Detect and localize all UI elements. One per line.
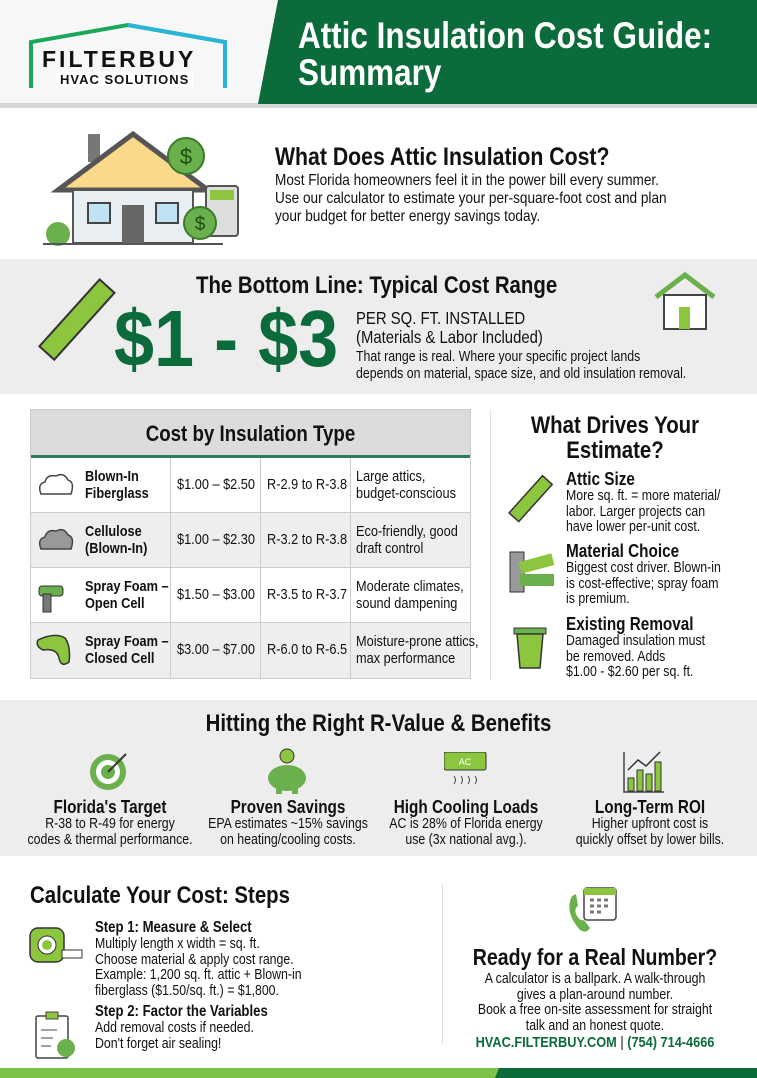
- text block: A calculator is a ballpark. A walk-through: [485, 971, 705, 987]
- rows: $3.00 – $7.00: [177, 641, 255, 658]
- benefit: cooling: AC is 28% of Florida energy: [389, 816, 543, 832]
- rows: $1.00 – $2.30: [177, 531, 255, 548]
- text block: Use our calculator to estimate your per-square-foot cost and plan: [275, 190, 667, 207]
- icon: clipboard: [35, 1012, 75, 1059]
- rows: Eco-friendly, good: [356, 523, 458, 540]
- logo: HVAC SOLUTIONS: [60, 72, 189, 87]
- icon: tape measure: [29, 927, 82, 963]
- rows: Large attics,: [356, 468, 425, 485]
- benefit: roi: Long-Term ROI: [595, 797, 705, 817]
- benefit: roi: Higher upfront cost is: [592, 816, 708, 832]
- text block: your budget for better energy savings today.: [275, 208, 540, 225]
- text block: PER SQ. FT. INSTALLED: [356, 308, 525, 328]
- icon: phone calendar: [569, 887, 617, 932]
- driver: removal: Damaged insulation must: [566, 633, 705, 649]
- benefit: target: R-38 to R-49 for energy: [45, 816, 175, 832]
- title banner: [258, 0, 757, 104]
- benefit: cooling: High Cooling Loads: [394, 797, 538, 817]
- rows: R-3.5 to R-3.7: [267, 586, 347, 603]
- rows: Cellulose: [85, 523, 142, 540]
- step 2: Step 2: Factor the Variables: [95, 1003, 268, 1020]
- benefit: savings: [208, 797, 368, 848]
- rows: $1.50 – $3.00: [177, 586, 255, 603]
- rows: Fiberglass: [85, 484, 149, 502]
- heading: Calculate Your Cost: Steps: [30, 882, 290, 909]
- rows: Blown-In: [85, 468, 139, 485]
- rows: Spray Foam –: [85, 633, 169, 650]
- panel: steps: [29, 882, 302, 1059]
- driver: removal: [566, 614, 705, 680]
- driver: material: [566, 541, 721, 607]
- driver: material: is cost-effective; spray foam: [566, 576, 719, 592]
- logo: [29, 23, 227, 88]
- panel: cost range: depends on material, space size, and old insulation removal.: [356, 366, 686, 382]
- title banner: Attic Insulation Cost Guide:: [298, 15, 712, 56]
- icon: house outline: [654, 272, 716, 330]
- text block: gives a plan-around number.: [517, 986, 673, 1002]
- benefit: target: Florida's Target: [53, 797, 167, 817]
- benefit: cooling: use (3x national avg.).: [405, 832, 527, 848]
- table header: [31, 410, 470, 458]
- step 1: Example: 1,200 sq. ft. attic + Blown-in: [95, 967, 302, 983]
- step 2: Don't forget air sealing!: [95, 1036, 221, 1052]
- panel: drivers: [508, 412, 721, 680]
- heading: What Does Attic Insulation Cost?: [275, 143, 610, 171]
- text block: Most Florida homeowners feel it in the power bill every summer.: [275, 172, 659, 189]
- rows: draft control: [356, 540, 423, 556]
- panel: cost by insulation type table: [30, 409, 471, 679]
- driver: attic size: More sq. ft. = more material/: [566, 488, 720, 504]
- rows: (Blown-In): [85, 540, 147, 556]
- step 2: Add removal costs if needed.: [95, 1020, 254, 1036]
- panel: cost range: That range is real. Where your specific project lands: [356, 349, 640, 365]
- contact: HVAC.FILTERBUY.COM | (754) 714-4666: [476, 1034, 714, 1051]
- icon: swatches: [510, 552, 554, 592]
- benefit: roi: [576, 797, 724, 848]
- benefit: cooling: [389, 797, 543, 848]
- benefit: savings: EPA estimates ~15% savings: [208, 816, 368, 832]
- logo: FILTERBUY: [42, 46, 196, 72]
- text block: [356, 308, 543, 347]
- driver: material: Material Choice: [566, 541, 679, 561]
- rows: Closed Cell: [85, 650, 154, 666]
- heading: [530, 412, 699, 464]
- rows: R-2.9 to R-3.8: [267, 476, 347, 493]
- heading: Ready for a Real Number?: [473, 944, 717, 970]
- footer bar: [0, 1068, 757, 1078]
- driver: attic size: Attic Size: [566, 469, 635, 489]
- rows: Open Cell: [85, 594, 145, 612]
- rows: budget-conscious: [356, 484, 456, 502]
- icon: house with money: [43, 131, 239, 246]
- step 1: [95, 919, 302, 998]
- rows: R-6.0 to R-6.5: [267, 641, 347, 658]
- rows: Moderate climates,: [356, 578, 464, 595]
- driver: removal: $1.00 - $2.60 per sq. ft.: [566, 664, 693, 680]
- step 1: Choose material & apply cost range.: [95, 952, 294, 968]
- icon: AC unit: [444, 752, 486, 784]
- panel: r-value & benefits: [0, 700, 757, 856]
- text block: talk and an honest quote.: [526, 1018, 664, 1034]
- driver: removal: Existing Removal: [566, 614, 694, 634]
- text block: [478, 971, 712, 1034]
- benefit: roi: quickly offset by lower bills.: [576, 832, 724, 848]
- rows: Moisture-prone attics,: [356, 633, 479, 650]
- driver: material: is premium.: [566, 591, 630, 607]
- text block: [275, 172, 667, 225]
- heading: The Bottom Line: Typical Cost Range: [196, 272, 557, 299]
- step 1: Multiply length x width = sq. ft.: [95, 936, 260, 952]
- icon: house with money: $: [180, 144, 192, 169]
- rows: R-3.2 to R-3.8: [267, 531, 347, 548]
- icon: piggy bank: [268, 748, 306, 794]
- panel: call to action: [473, 887, 717, 1051]
- driver: attic size: labor. Larger projects can: [566, 504, 705, 520]
- panel: intro: [43, 131, 667, 246]
- title banner: Summary: [298, 52, 441, 93]
- rows: $1.00 – $2.50: [177, 476, 255, 493]
- table header: Cost by Insulation Type: [146, 421, 355, 446]
- benefit: target: [27, 797, 193, 848]
- step 2: [95, 1003, 268, 1052]
- benefit: savings: Proven Savings: [231, 797, 345, 817]
- icon: ruler: [38, 278, 116, 362]
- big number: $1 - $3: [114, 294, 338, 383]
- heading: Hitting the Right R-Value & Benefits: [206, 710, 551, 737]
- heading: Estimate?: [566, 437, 664, 464]
- panel: cost range: [0, 259, 757, 394]
- icon: target: [90, 753, 127, 790]
- driver: attic size: [566, 469, 720, 535]
- text block: Book a free on-site assessment for straight: [478, 1002, 712, 1018]
- driver: material: Biggest cost driver. Blown-in: [566, 560, 721, 576]
- driver: attic size: have lower per-unit cost.: [566, 519, 700, 535]
- icon: trash: [514, 628, 546, 669]
- icon: ruler: [508, 474, 554, 523]
- icon: house with money: $: [195, 214, 206, 235]
- benefit: target: codes & thermal performance.: [27, 832, 193, 848]
- heading: What Drives Your: [531, 412, 699, 439]
- rows: sound dampening: [356, 594, 457, 612]
- text block: (Materials & Labor Included): [356, 327, 543, 347]
- icon: growth chart: [623, 752, 664, 793]
- header: [0, 0, 757, 108]
- driver: removal: be removed. Adds: [566, 648, 665, 664]
- rows: Spray Foam –: [85, 578, 169, 595]
- step 1: fiberglass ($1.50/sq. ft.) = $1,800.: [95, 982, 279, 998]
- icon: AC unit: AC: [459, 757, 472, 767]
- benefit: savings: on heating/cooling costs.: [220, 832, 356, 848]
- rows: [31, 458, 479, 678]
- rows: max performance: [356, 650, 455, 666]
- step 1: Step 1: Measure & Select: [95, 919, 252, 936]
